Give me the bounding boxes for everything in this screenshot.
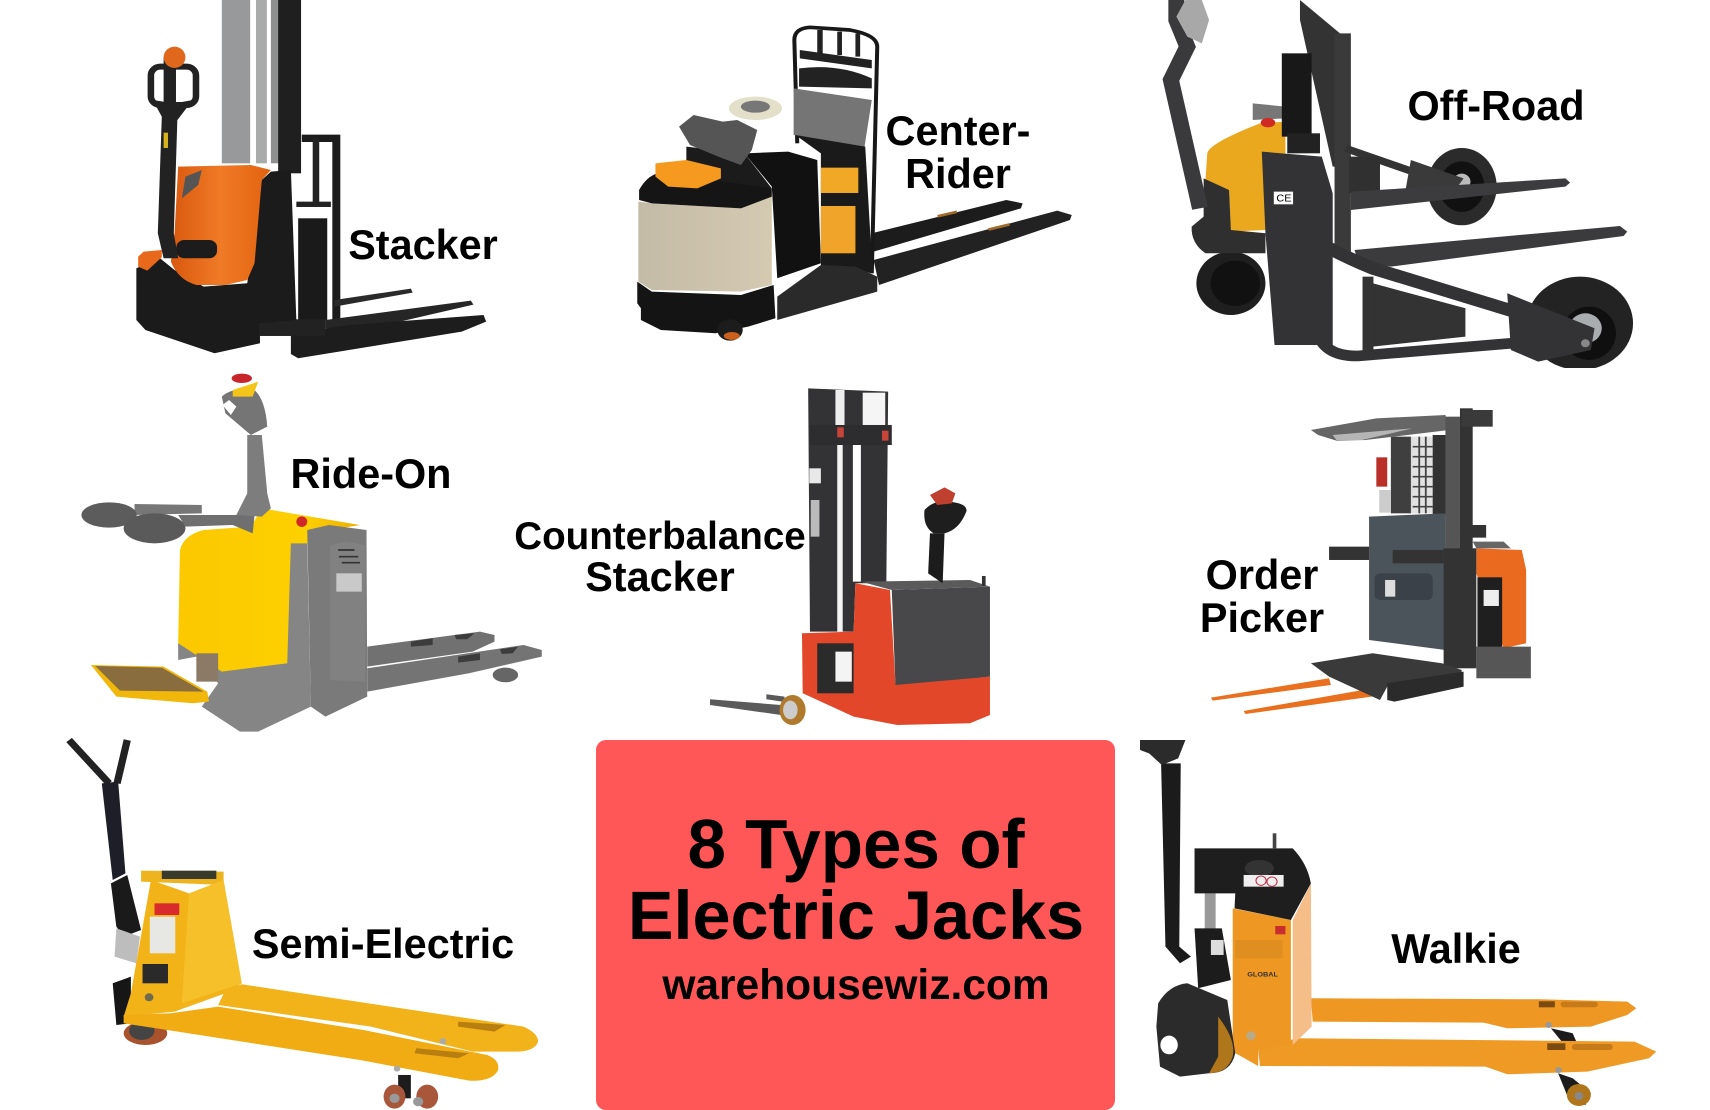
CE mark: CE bbox=[1276, 194, 1292, 205]
title: 8 Types of Electric Jacks: Electric Jacks bbox=[628, 878, 1084, 954]
label: Walkie: Walkie bbox=[1391, 926, 1521, 972]
label: Ride-On: Ride-On bbox=[291, 451, 451, 497]
label: Center-Rider: Rider bbox=[905, 151, 1011, 197]
label: Order Picker: Order bbox=[1206, 552, 1318, 598]
truck: order picker bbox=[1211, 408, 1531, 714]
truck: semi-electric bbox=[69, 740, 538, 1109]
title panel bbox=[596, 740, 1115, 1110]
label: Center-Rider bbox=[886, 108, 1030, 197]
label: Order Picker: Picker bbox=[1200, 595, 1324, 641]
brand mark: GLOBAL bbox=[1247, 972, 1279, 979]
label: Center-Rider: Center- bbox=[886, 108, 1030, 154]
truck: counterbalance stacker bbox=[710, 388, 990, 725]
truck: walkie bbox=[1140, 740, 1656, 1106]
label: Semi-Electric: Semi-Electric bbox=[252, 921, 514, 967]
label: Stacker: Stacker bbox=[348, 222, 498, 268]
website: warehousewiz.com bbox=[661, 962, 1050, 1009]
truck: center-rider bbox=[637, 27, 1072, 341]
label: Off-Road: Off-Road bbox=[1407, 83, 1585, 129]
label: Counterbalance Stacker: Stacker bbox=[585, 554, 735, 600]
label: Counterbalance Stacker: Counterbalance bbox=[514, 515, 806, 558]
label: Order Picker bbox=[1200, 552, 1324, 641]
truck: ride-on bbox=[81, 374, 542, 732]
label: Counterbalance Stacker bbox=[514, 515, 806, 600]
truck: stacker bbox=[136, 0, 486, 358]
truck: off-road bbox=[1171, 0, 1633, 370]
title: 8 Types of Electric Jacks bbox=[628, 805, 1084, 954]
title: 8 Types of Electric Jacks: 8 Types of bbox=[687, 805, 1025, 883]
